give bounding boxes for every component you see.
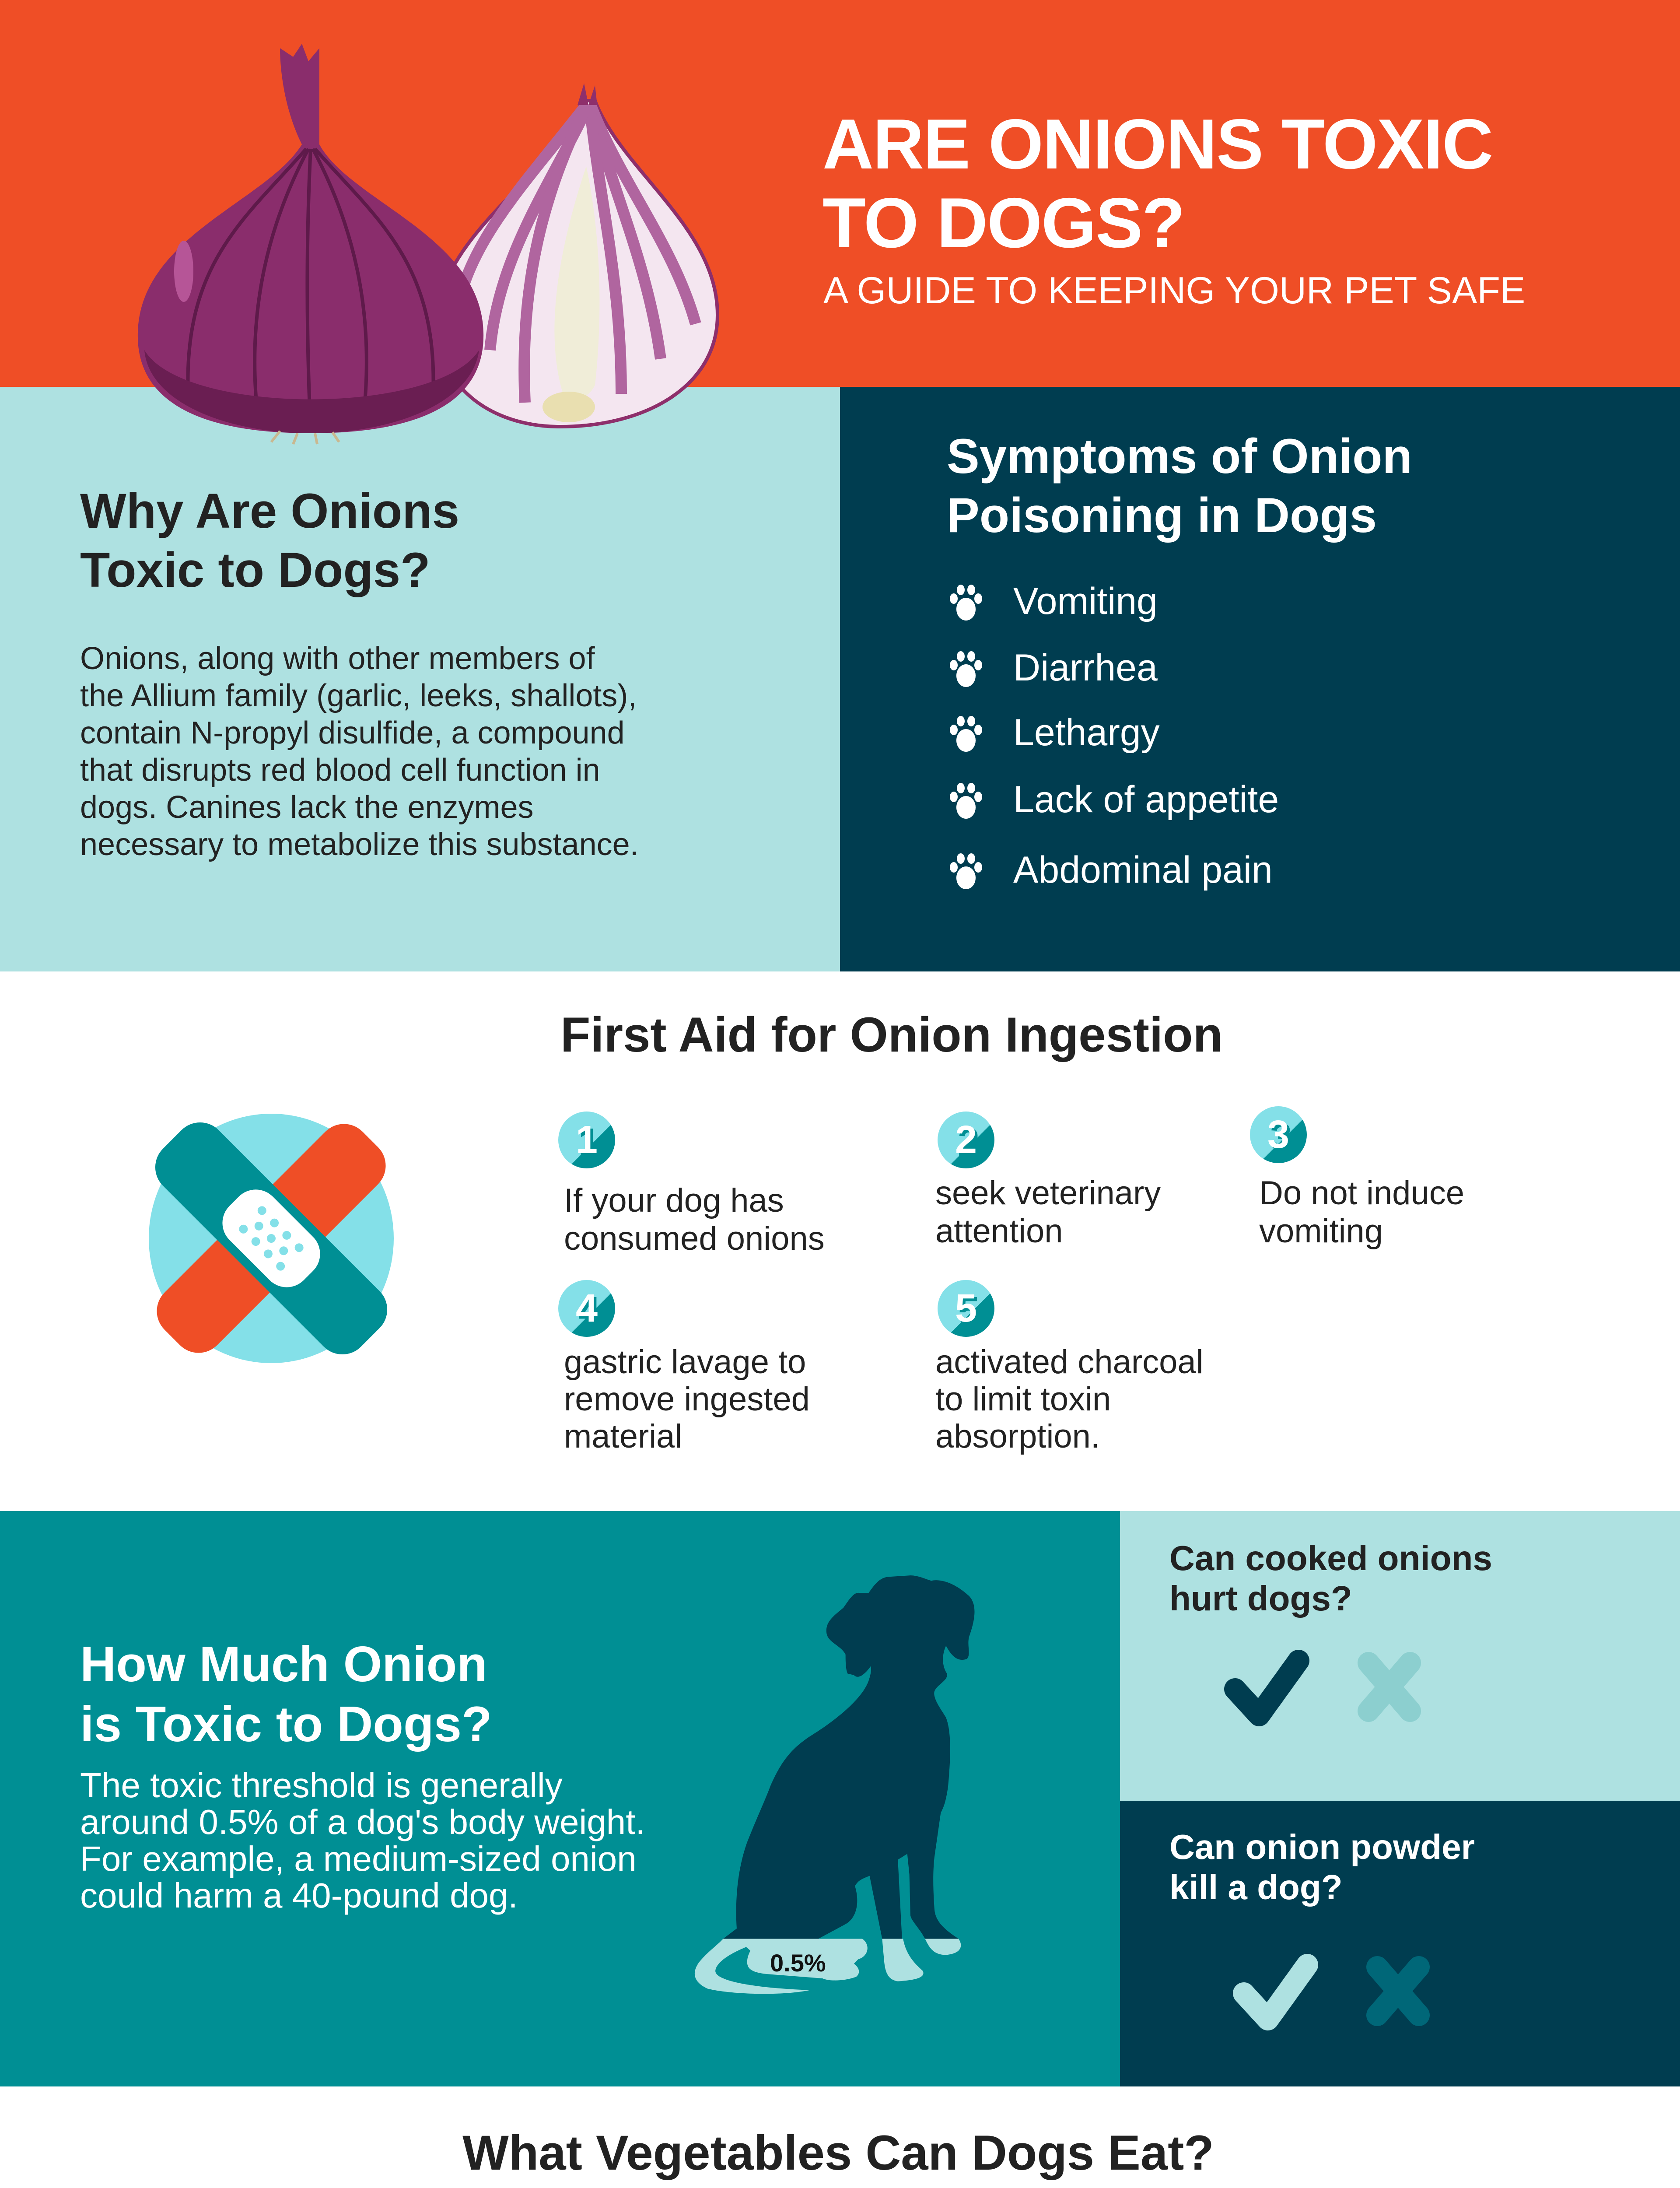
illustration: onions	[0, 0, 788, 481]
question: onion powder: kill a dog?	[1169, 1868, 1343, 1907]
list: symptoms: Vomiting	[1013, 580, 1158, 622]
text block: threshold: could harm a 40-pound dog.	[80, 1876, 518, 1915]
text block: why: Onions, along with other members of	[80, 641, 595, 676]
step 4	[558, 1280, 864, 1464]
step 1: If your dog has	[564, 1182, 784, 1219]
text block: why: dogs. Canines lack the enzymes	[80, 790, 534, 825]
question: onion powder: Can onion powder	[1169, 1827, 1475, 1866]
step 2: attention	[935, 1213, 1063, 1250]
text block: threshold: The toxic threshold is generally	[80, 1766, 563, 1805]
title	[822, 105, 1492, 263]
heading: symptoms	[947, 427, 1412, 545]
step 2	[938, 1112, 1244, 1260]
step 5	[938, 1280, 1266, 1464]
heading: symptoms: Poisoning in Dogs	[947, 488, 1377, 543]
panel: how much onion	[0, 1511, 1120, 2086]
panel: onion powder	[1120, 1801, 1680, 2086]
list: symptoms	[945, 578, 1514, 893]
step 4: material	[564, 1418, 682, 1455]
panel: cooked onions	[1120, 1511, 1680, 1801]
step 1: consumed onions	[564, 1220, 825, 1257]
heading: why are onions toxic: Toxic to Dogs?	[80, 543, 430, 597]
illustration: dog silhouette	[678, 1558, 1006, 2017]
step 3: 3	[1267, 1113, 1289, 1157]
heading: symptoms: Symptoms of Onion	[947, 429, 1412, 484]
step 5: 5	[955, 1287, 977, 1330]
question: cooked onions: hurt dogs?	[1169, 1579, 1352, 1618]
list: symptoms: Diarrhea	[1013, 647, 1158, 689]
heading: why are onions toxic: Why Are Onions	[80, 484, 459, 538]
header band	[0, 0, 1680, 387]
step 4: gastric lavage to	[564, 1343, 806, 1381]
heading: how much onion	[80, 1634, 492, 1754]
list: symptoms: Lack of appetite	[1013, 778, 1279, 820]
text block: why: contain N-propyl disulfide, a compound	[80, 715, 625, 750]
step 2: 2	[955, 1118, 977, 1162]
title: TO DOGS?	[822, 183, 1184, 263]
text block: why: necessary to metabolize this substance.	[80, 827, 639, 862]
step 3	[1250, 1106, 1556, 1255]
label: 0.5%: 0.5%	[770, 1949, 826, 1977]
step 2: seek veterinary	[935, 1175, 1161, 1212]
step 1: 1	[576, 1118, 598, 1162]
text block: threshold	[80, 1767, 645, 1914]
question: cooked onions: Can cooked onions	[1169, 1539, 1492, 1578]
step 1	[558, 1112, 864, 1260]
question: cooked onions	[1169, 1538, 1651, 1739]
icon: bandage	[140, 1107, 402, 1370]
list: symptoms: Lethargy	[1013, 712, 1160, 754]
list: symptoms: Abdominal pain	[1013, 849, 1273, 891]
step 3: Do not induce	[1259, 1175, 1464, 1212]
text block: threshold: around 0.5% of a dog's body weight.	[80, 1802, 645, 1841]
panel: why onions toxic	[0, 387, 840, 971]
step 5: activated charcoal	[935, 1343, 1204, 1381]
heading: vegetables: What Vegetables Can Dogs Eat?	[462, 2125, 1214, 2180]
text block: threshold: For example, a medium-sized onion	[80, 1839, 637, 1878]
text block: why	[80, 640, 639, 863]
question: onion powder	[1169, 1827, 1651, 2046]
heading: how much onion: How Much Onion	[80, 1637, 487, 1692]
heading: first aid: First Aid for Onion Ingestion	[560, 1007, 1223, 1062]
icon: check and x	[1218, 1641, 1436, 1737]
subtitle: A GUIDE TO KEEPING YOUR PET SAFE	[823, 270, 1525, 312]
step 5: absorption.	[935, 1418, 1100, 1455]
heading: how much onion: is Toxic to Dogs?	[80, 1697, 492, 1752]
step 5: to limit toxin	[935, 1381, 1111, 1418]
step 3: vomiting	[1259, 1213, 1383, 1250]
text block: why: the Allium family (garlic, leeks, shallots),	[80, 678, 637, 713]
heading: why are onions toxic	[80, 481, 459, 600]
icon: check and x	[1226, 1945, 1445, 2041]
title: ARE ONIONS TOXIC	[822, 105, 1492, 184]
text block: why: that disrupts red blood cell function in	[80, 753, 600, 788]
panel: symptoms	[840, 387, 1680, 971]
step 4: 4	[576, 1287, 598, 1330]
step 4: remove ingested	[564, 1381, 810, 1418]
